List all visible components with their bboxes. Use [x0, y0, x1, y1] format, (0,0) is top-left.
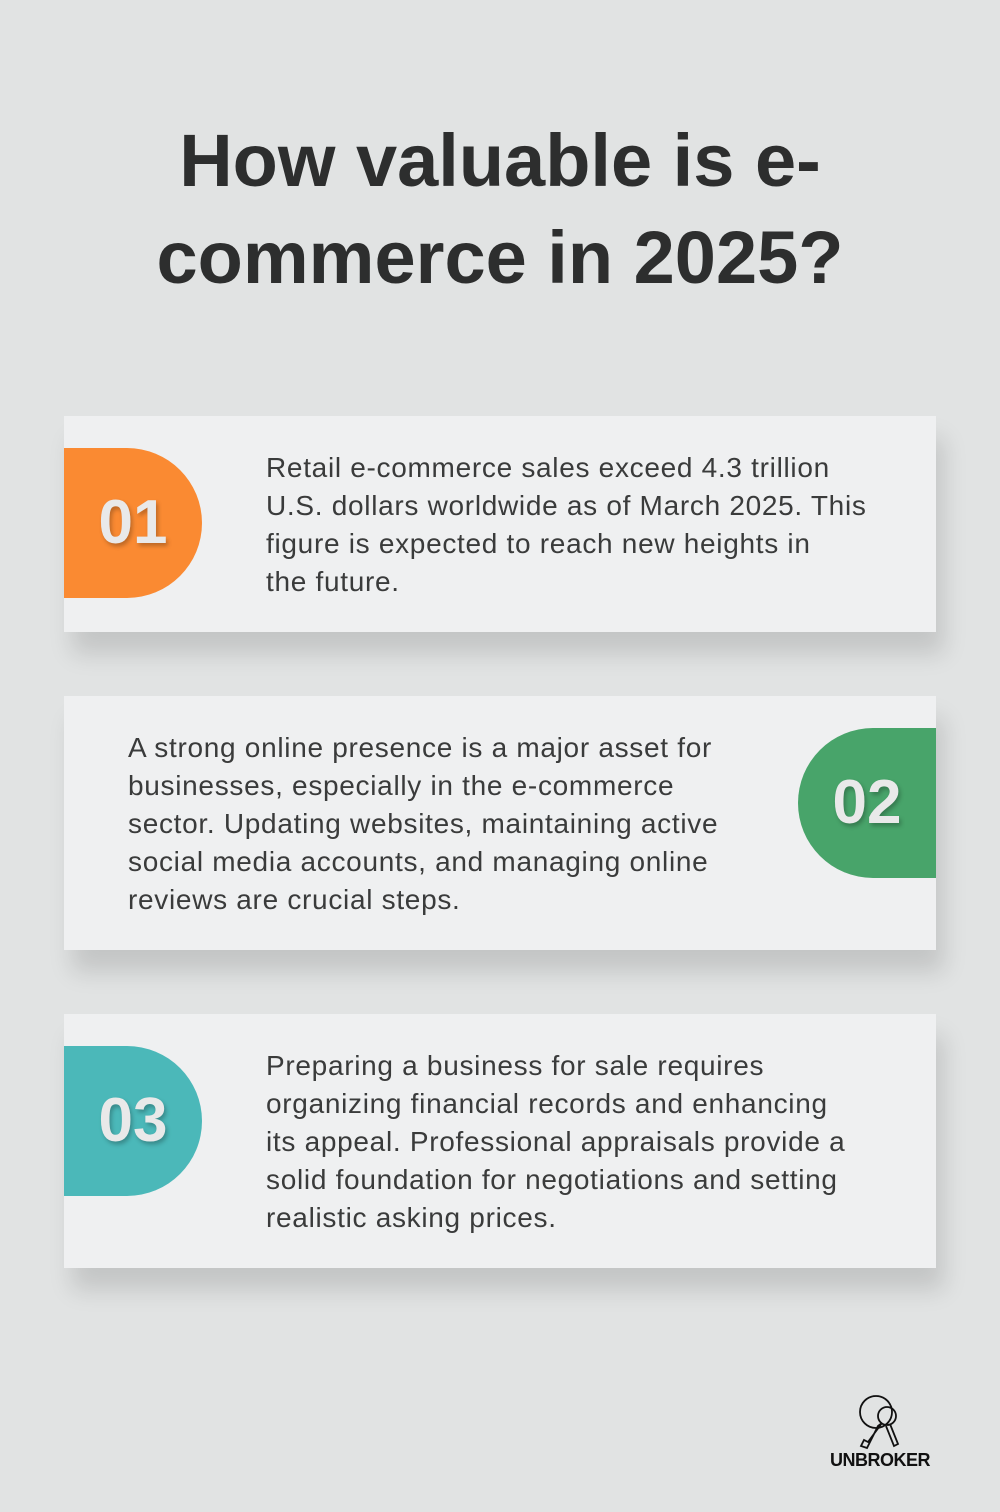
panel: card 1	[64, 416, 936, 632]
logo	[830, 1395, 930, 1470]
text 2: reviews are crucial steps.	[128, 884, 461, 915]
text 1: Retail e-commerce sales exceed 4.3 trillion	[266, 452, 830, 483]
panel: card 3	[64, 1014, 936, 1268]
badge 03	[64, 1046, 202, 1196]
text 1: U.S. dollars worldwide as of March 2025. This	[266, 490, 867, 521]
text 2	[128, 732, 718, 915]
text 3: its appeal. Professional appraisals provide a	[266, 1126, 845, 1157]
text 3: realistic asking prices.	[266, 1202, 557, 1233]
text 2: social media accounts, and managing online	[128, 846, 708, 877]
text 2: businesses, especially in the e-commerce	[128, 770, 674, 801]
title: How valuable is e-	[179, 119, 821, 202]
text 3	[266, 1050, 845, 1233]
text 3: Preparing a business for sale requires	[266, 1050, 764, 1081]
panel: card 2	[64, 696, 936, 950]
badge 02: 02	[833, 768, 901, 837]
badge 03: 03	[99, 1086, 167, 1155]
text 2: sector. Updating websites, maintaining active	[128, 808, 718, 839]
brand name: UNBROKER	[830, 1450, 930, 1470]
text 3: solid foundation for negotiations and setting	[266, 1164, 838, 1195]
badge 01	[64, 448, 202, 598]
title	[157, 119, 843, 299]
text 1: the future.	[266, 566, 400, 597]
badge 01: 01	[99, 488, 167, 557]
badge 02	[798, 728, 936, 878]
text 3: organizing financial records and enhancing	[266, 1088, 828, 1119]
text 2: A strong online presence is a major asset for	[128, 732, 712, 763]
text 1	[266, 452, 867, 597]
text 1: figure is expected to reach new heights in	[266, 528, 811, 559]
icon: keys	[859, 1395, 900, 1450]
title: commerce in 2025?	[157, 216, 843, 299]
